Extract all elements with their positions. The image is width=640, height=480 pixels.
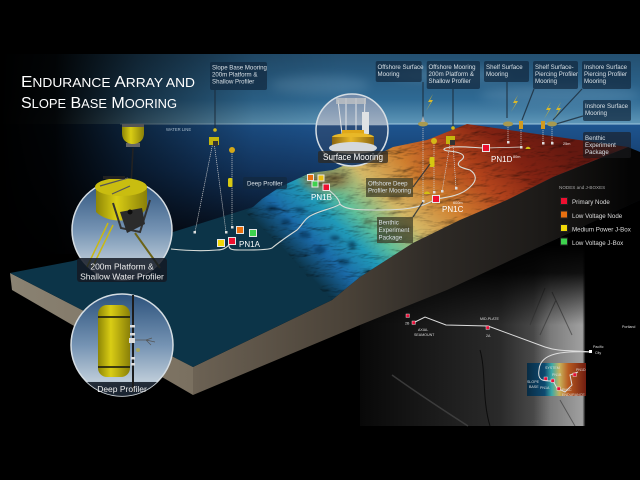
PN1C node <box>432 196 440 202</box>
callout: offshore surface: Mooring <box>378 71 400 78</box>
callout: benthic right: Experiment <box>585 142 616 149</box>
callout: offshore deep profiler <box>366 164 430 197</box>
depth labels: 25m <box>563 142 570 146</box>
shelf and inshore moorings <box>503 82 583 149</box>
water line label: WATER LINE <box>166 127 191 132</box>
callout: offshore mooring: 200m Platform & <box>428 71 474 78</box>
title line 2: SLOPE BASE MOORING <box>21 95 177 112</box>
depth labels <box>453 142 570 205</box>
map labels: City <box>595 351 601 355</box>
map labels: Portland <box>622 325 635 329</box>
callout: shelf piercing: Mooring <box>535 78 557 85</box>
surface mooring label <box>318 151 388 163</box>
callout: offshore surface <box>376 61 424 82</box>
callout: inshore piercing <box>582 61 631 89</box>
left darkness <box>0 54 460 254</box>
callout: slope base <box>210 62 267 90</box>
clouds <box>270 68 640 105</box>
pacific city marker <box>589 350 592 353</box>
deep profiler label: Deep Profiler <box>97 384 147 394</box>
callout: inshore piercing: Inshore Surface <box>584 64 628 71</box>
profiler sensors <box>129 325 140 366</box>
depth labels: 80m <box>513 155 520 159</box>
circle: surface mooring: Surface Mooring <box>323 152 383 163</box>
circle: platform: 200m Platform & <box>90 262 154 272</box>
map labels: PN1D <box>576 368 586 372</box>
map nodes <box>406 314 576 390</box>
ocean water column <box>0 124 640 254</box>
map labels: Pacific <box>593 345 604 349</box>
map labels: PN1C <box>562 388 572 392</box>
map labels: PN1A <box>540 386 550 390</box>
map labels: SEAMOUNT <box>414 333 435 337</box>
map labels: ENDURANCE <box>562 393 585 397</box>
map labels <box>405 317 635 397</box>
callout: offshore deep profiler: Profiler Mooring <box>368 188 411 194</box>
map cables <box>415 317 591 392</box>
callout: deep profiler <box>243 177 287 189</box>
callout: benthic left: Benthic <box>378 220 399 226</box>
callout: offshore mooring: Shallow Profiler <box>428 78 471 85</box>
callout: slope base: 200m Platform & <box>212 72 257 78</box>
callout: shelf surface: Shelf Surface <box>486 64 523 71</box>
depth labels: 600m <box>453 201 462 205</box>
water line <box>120 123 640 125</box>
callout: benthic right <box>583 132 631 158</box>
map labels: BASE <box>529 385 539 389</box>
platform cage <box>113 200 150 232</box>
map labels: MID-PLATE <box>480 317 500 321</box>
callout: benthic left: Package <box>378 234 403 242</box>
callout: benthic right: Benthic <box>585 135 605 142</box>
PN1D node <box>482 144 490 152</box>
callout: slope base: Slope Base Mooring <box>212 64 267 72</box>
callout: shelf surface: Mooring <box>486 71 508 78</box>
black band below the scene <box>0 254 640 480</box>
legend: Medium Power J-Box <box>572 226 632 234</box>
callout: inshore piercing: Piercing Profiler <box>584 71 627 78</box>
circle: platform: Shallow Water Profiler <box>80 272 164 282</box>
callout: benthic left <box>377 202 423 243</box>
legend <box>559 185 632 247</box>
callout: benthic left: Experiment <box>378 227 410 234</box>
PN1B label: PN1B <box>311 193 332 202</box>
callout: benthic right: Package <box>585 149 609 156</box>
platform legs <box>87 223 113 268</box>
sea floor slab top <box>10 207 332 367</box>
platform body <box>96 188 147 221</box>
cable <box>171 147 522 251</box>
callout: offshore deep profiler: Offshore Deep <box>368 180 408 188</box>
callout: deep profiler: Deep Profiler <box>247 180 283 188</box>
profiler capsule <box>98 305 130 377</box>
node group PN1A <box>218 226 256 246</box>
callout: slope base: Shallow Profiler <box>212 78 254 86</box>
terrain <box>240 120 640 305</box>
legend: NODES and J-BOXES <box>559 185 605 190</box>
circle: platform <box>72 176 172 282</box>
profiler wire <box>132 295 134 392</box>
PN1C label: PN1C <box>442 205 464 214</box>
callout: shelf surface <box>484 61 529 82</box>
platform label <box>77 258 167 282</box>
map panel <box>360 200 640 426</box>
legend: Low Voltage J-Box <box>572 240 624 247</box>
offshore moorings <box>418 82 458 205</box>
callout: offshore mooring <box>427 61 480 89</box>
PN1D label: PN1D <box>491 155 513 164</box>
sky <box>0 54 640 124</box>
title: ENDURANCE ARRAY AND <box>21 74 195 91</box>
legend: Low Voltage Node <box>572 213 623 220</box>
map labels: 2A <box>486 334 491 338</box>
PN1A label: PN1A <box>239 240 261 249</box>
map labels: AXIAL <box>418 328 428 332</box>
map labels: 2B <box>405 322 410 326</box>
map labels: SLOPE <box>527 380 540 384</box>
lightning bolts <box>426 94 561 119</box>
callout: offshore mooring: Offshore Mooring <box>428 64 475 71</box>
slope base mooring <box>194 90 228 234</box>
node group PN1B <box>308 174 330 190</box>
buoy on platform <box>122 124 144 205</box>
map labels: SYSTEM <box>545 366 560 370</box>
circle: surface mooring <box>316 94 388 166</box>
map inset <box>527 363 586 396</box>
circle: deep profiler <box>70 294 174 398</box>
callout: inshore surface: Inshore Surface <box>585 103 629 110</box>
callout: shelf piercing: Shelf Surface- <box>535 64 574 71</box>
callout: shelf piercing: Piercing Profiler <box>535 71 578 78</box>
callout: inshore piercing: Mooring <box>584 78 606 85</box>
callout: offshore surface: Offshore Surface <box>378 64 424 71</box>
map labels: PN1B <box>552 373 562 377</box>
deep profiler mooring <box>228 147 235 228</box>
sea floor slab side <box>10 147 640 395</box>
legend: Primary Node <box>572 199 610 206</box>
callout: inshore surface <box>583 100 631 121</box>
callout: inshore surface: Mooring <box>585 110 607 117</box>
callout: shelf piercing <box>533 61 578 89</box>
